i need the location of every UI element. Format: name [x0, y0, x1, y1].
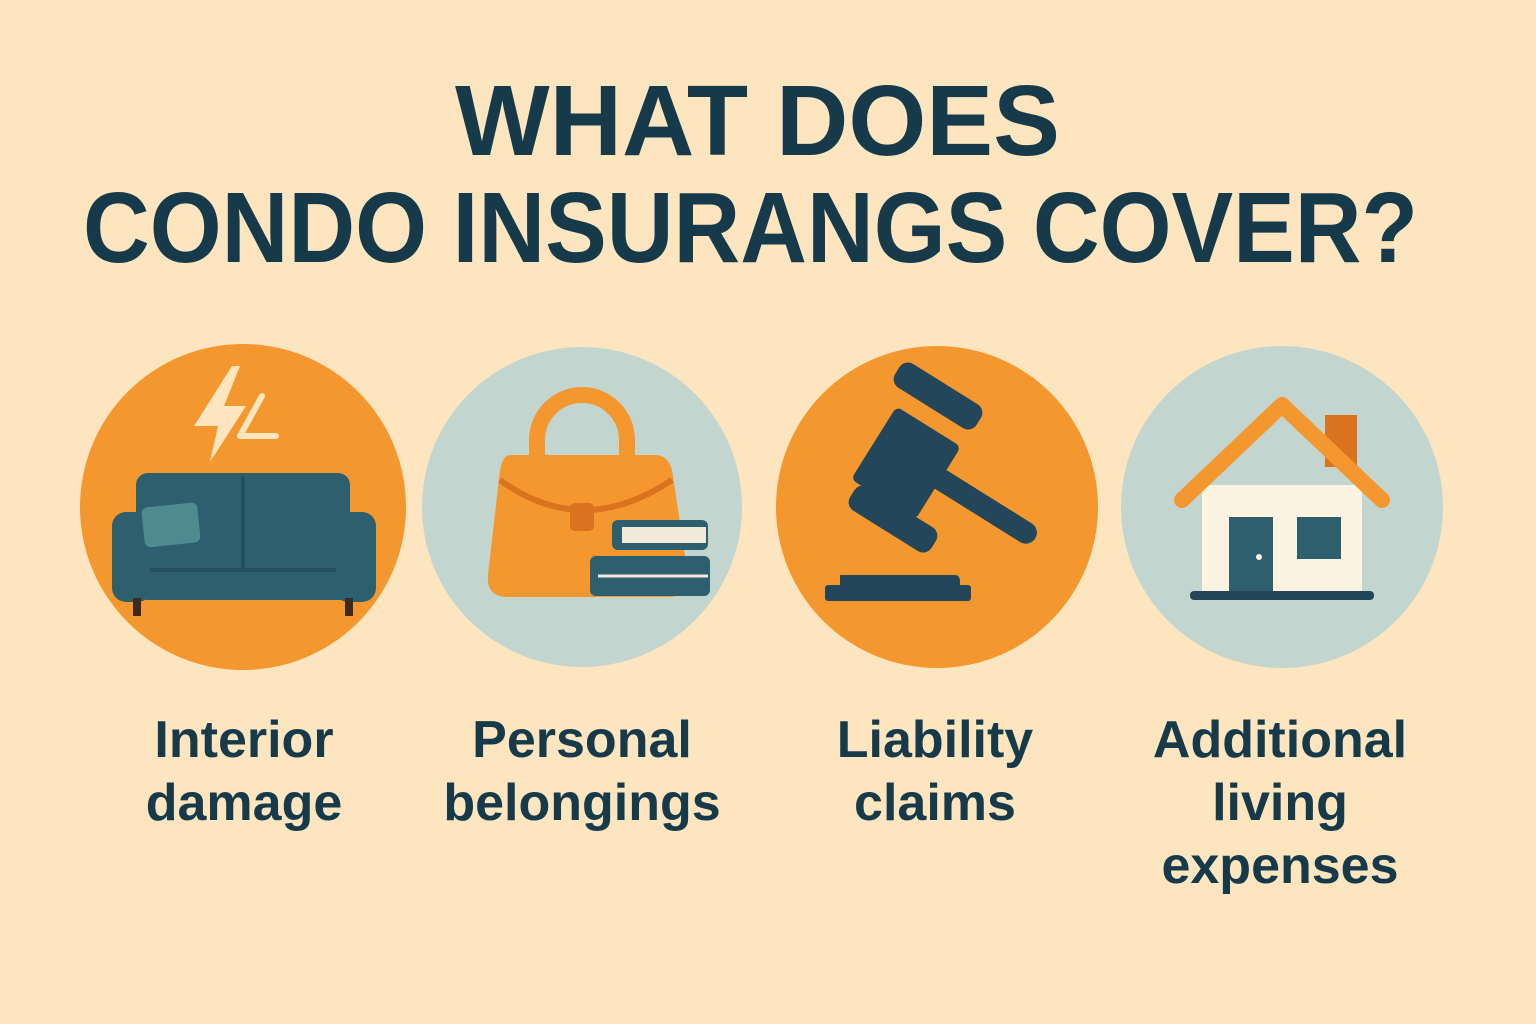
title: WHAT DOES — [455, 65, 1060, 177]
panel: personal belongings — [422, 347, 742, 667]
label: additional living expenses: Additional — [1153, 711, 1407, 769]
title: CONDO INSURANGS COVER? — [83, 172, 1418, 284]
labels — [146, 711, 1407, 895]
panel: interior damage — [80, 344, 406, 670]
label: additional living expenses: expenses — [1161, 837, 1399, 895]
title — [83, 65, 1418, 284]
icon: sofa — [112, 473, 376, 616]
panel: liability claims — [776, 346, 1098, 668]
panel: additional living expenses — [1121, 346, 1443, 668]
label: interior damage: Interior — [154, 711, 334, 769]
label: liability claims: Liability — [837, 711, 1033, 769]
label: liability claims: claims — [854, 774, 1016, 832]
icon: gavel — [825, 359, 1041, 601]
label: personal belongings: belongings — [443, 774, 721, 832]
label: personal belongings: Personal — [472, 711, 692, 769]
icon: house — [1182, 405, 1382, 600]
icon: bag — [488, 395, 688, 597]
icon: lightning — [194, 366, 276, 462]
label: interior damage: damage — [146, 774, 342, 832]
label: additional living expenses: living — [1212, 774, 1348, 832]
icon: books — [590, 520, 710, 596]
